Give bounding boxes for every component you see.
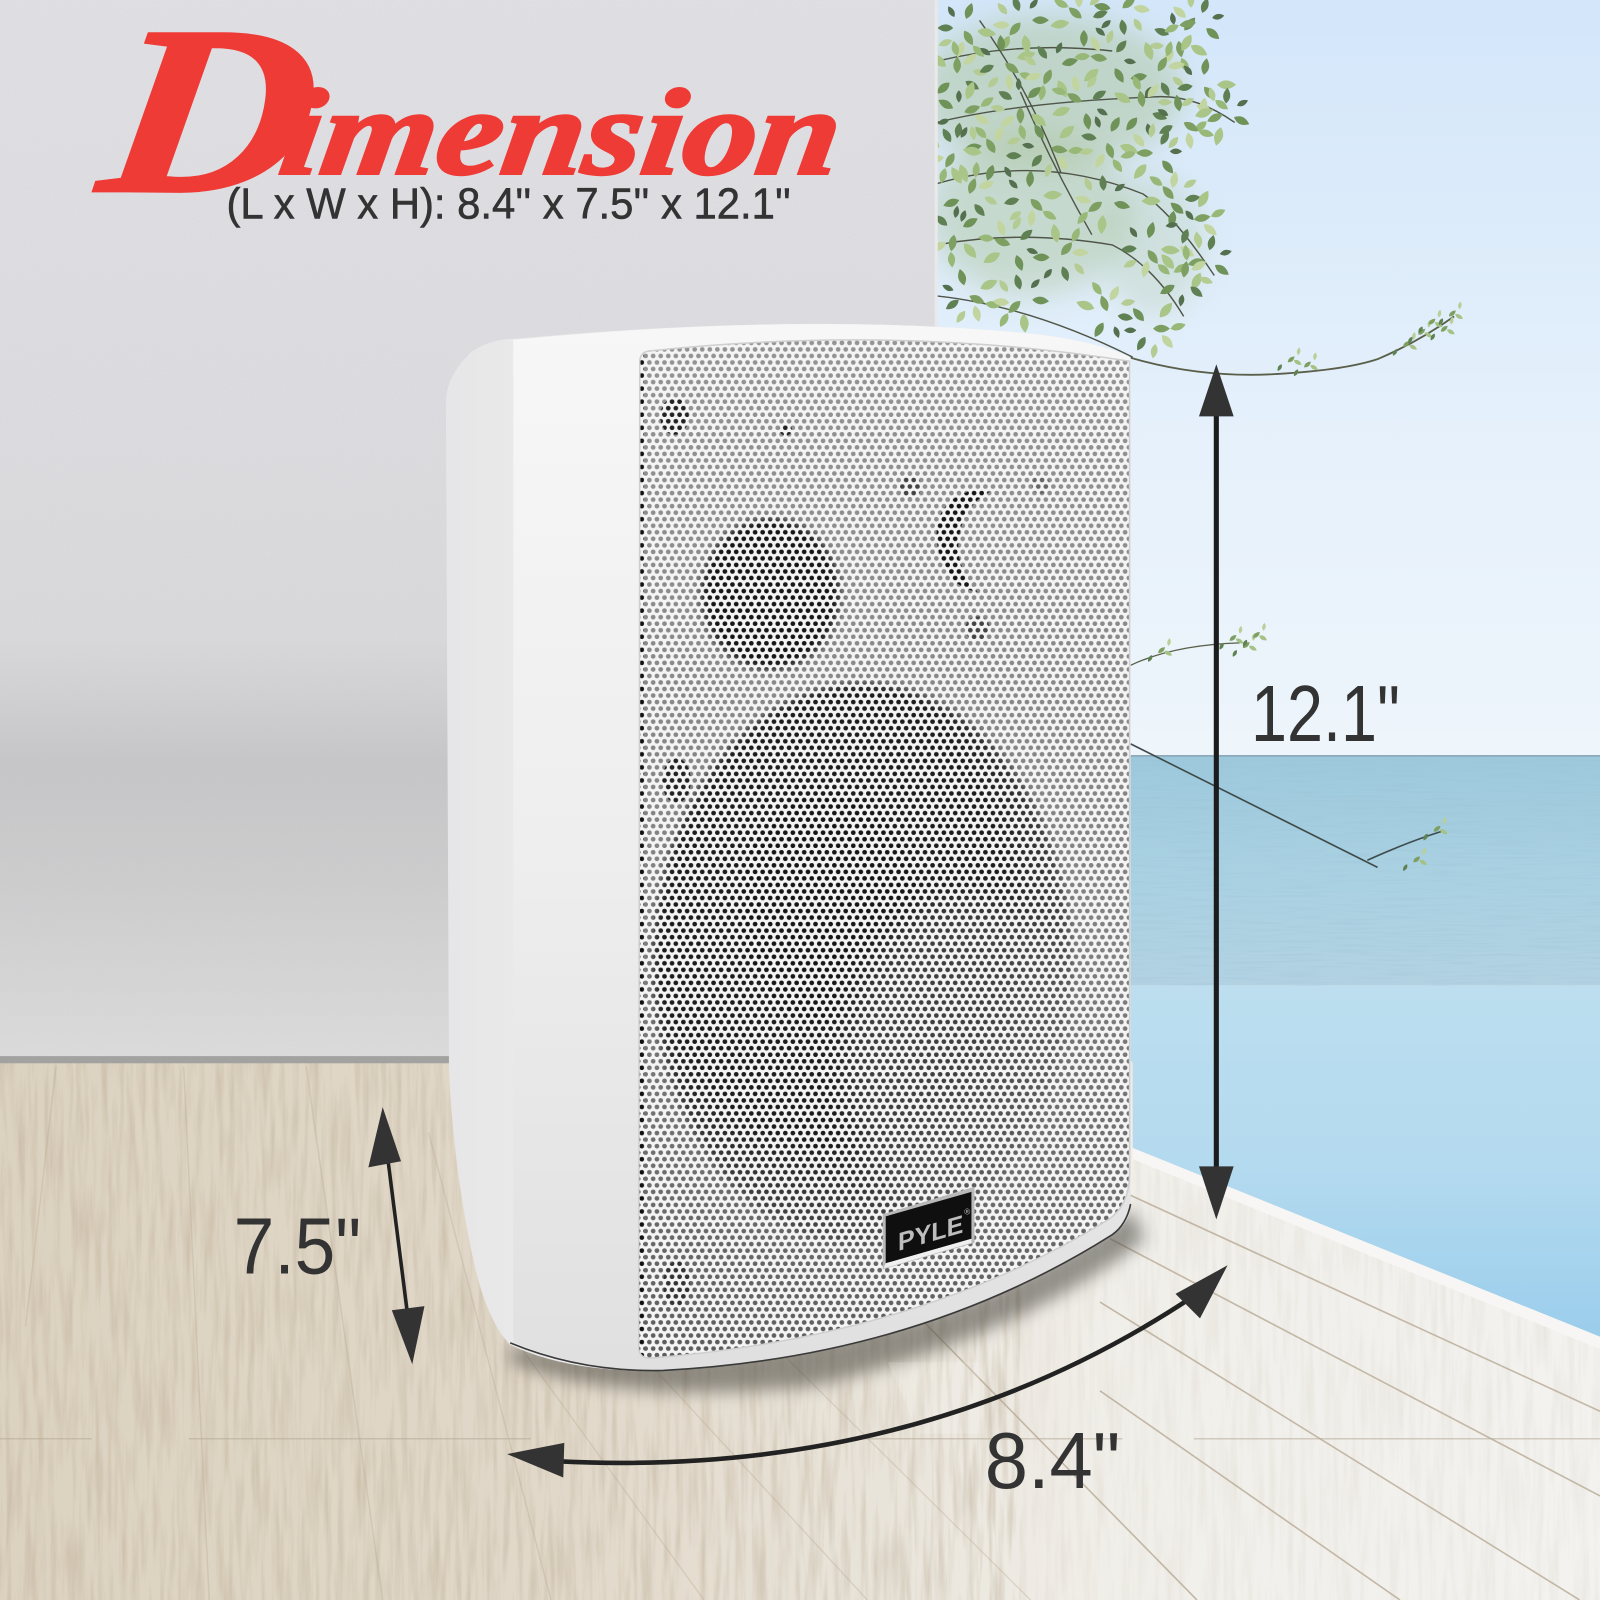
- wall background: [0, 0, 939, 1061]
- speaker front bezel: [513, 324, 1131, 1371]
- speaker grille: [633, 327, 1138, 1367]
- sea: [1122, 755, 1600, 986]
- speaker: [446, 324, 1138, 1371]
- wooden floor: [0, 1061, 1600, 1600]
- speaker cabinet side: [446, 324, 1131, 1371]
- tree and branches: [938, 0, 1250, 358]
- depth label: 7.5": [234, 1201, 361, 1290]
- grille outline: [639, 340, 1130, 1358]
- infinity pool: [1122, 986, 1600, 1343]
- height arrow: [1199, 364, 1234, 1219]
- width arrow: [507, 1265, 1228, 1478]
- depth arrow: [368, 1107, 424, 1364]
- width label: 8.4": [985, 1416, 1120, 1505]
- brand badge: [883, 1187, 974, 1269]
- wall and floor junction: [0, 1056, 939, 1063]
- right branch: [1129, 301, 1464, 377]
- speaker reflection on deck: [888, 1362, 980, 1434]
- subtitle dimensions: (L x W x H): 8.4'' x 7.5'' x 12.1'': [227, 179, 791, 228]
- brand badge: ®: [964, 1207, 970, 1216]
- wall edge behind speaker: [935, 0, 938, 337]
- speaker floor shadow: [510, 1209, 1145, 1392]
- sky background: [937, 0, 1600, 756]
- brand badge: PYLE: [898, 1209, 963, 1257]
- title: [86, 0, 863, 244]
- lower branch: [1131, 744, 1449, 872]
- height label: 12.1": [1251, 669, 1400, 758]
- middle branch: [1131, 623, 1268, 665]
- deck edge highlight: [1133, 1148, 1600, 1349]
- title: imension: [273, 64, 850, 200]
- speaker bottom edge: [510, 1204, 1131, 1371]
